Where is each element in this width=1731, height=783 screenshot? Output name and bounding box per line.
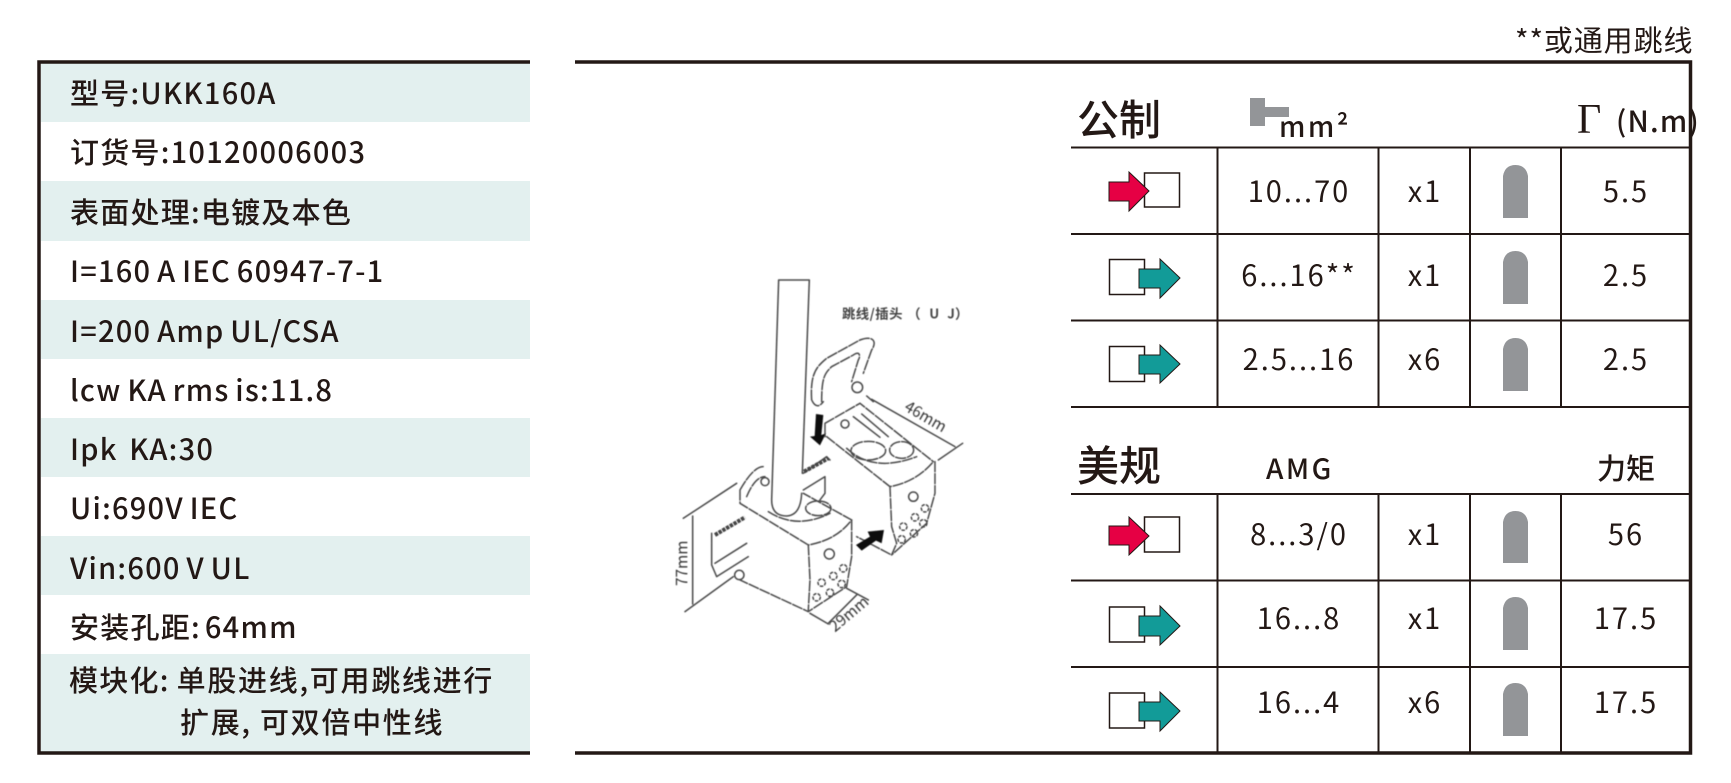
row: 16...4 [1110, 680, 1658, 736]
grid lines [1071, 147, 1690, 407]
row: 2.5...16 [1110, 337, 1649, 391]
icon: bolt [1250, 98, 1289, 126]
table: US [1071, 433, 1690, 752]
spec: model: 型号:UKK160A [70, 71, 277, 113]
label: jumper plug: （ [907, 304, 921, 323]
spec: IEC current: I=160 A IEC 60947-7-1 [70, 249, 384, 291]
spec: modularity: 模块化:单股进线,可用跳线进行 [69, 658, 494, 700]
label: jumper plug: J [947, 304, 955, 323]
label: jumper plug: U [929, 304, 939, 323]
diagram: terminal blocks with jumper [670, 280, 968, 636]
row: 2.5...16: x6 [1408, 337, 1442, 379]
spec: Icw: lcw KA rms is:11.8 [70, 368, 333, 410]
note: or universal jumper: **或通用跳线 [1515, 18, 1693, 60]
heading: mm²: mm² [1279, 106, 1351, 146]
row: 16...4: x6 [1408, 680, 1442, 722]
row: 10...70: x1 [1408, 169, 1442, 211]
spec: Ui: Ui:690V IEC [70, 486, 238, 528]
row: 16...8 [1110, 596, 1658, 650]
grid lines [1071, 494, 1690, 752]
row: 10...70: 10...70 [1248, 169, 1350, 211]
label: 77mm: 77mm [670, 541, 692, 586]
heading: N.m: (N.m) [1616, 99, 1700, 141]
heading: torque: 力矩 [1597, 446, 1655, 488]
row: 8...3/0: x1 [1408, 512, 1442, 554]
row: 8...3/0: 8...3/0 [1250, 512, 1348, 554]
row: 10...70: 5.5 [1603, 169, 1649, 211]
row: 16...4: 17.5 [1594, 680, 1658, 722]
panel: wiring tables [575, 18, 1700, 753]
row: 6...16** [1110, 251, 1649, 304]
row: 16...8: 17.5 [1594, 596, 1658, 638]
label: jumper plug: 跳线/插头 [842, 304, 903, 323]
row: 10...70 [1109, 165, 1649, 218]
table: metric [1071, 87, 1700, 407]
row: 16...8: x1 [1408, 596, 1442, 638]
heading: metric: 公制 [1077, 87, 1161, 148]
row: 8...3/0 [1109, 511, 1644, 563]
label: 46mm: 46mm [901, 395, 951, 437]
heading: AMG: AMG [1266, 448, 1334, 488]
spec: modularity: 扩展, 可双倍中性线 [180, 700, 444, 742]
spec: mounting hole distance: 安装孔距:64mm [70, 605, 298, 647]
label: jumper plug: ） [955, 304, 968, 323]
arrow: jumper insertion [810, 414, 826, 445]
heading: US: 美规 [1077, 433, 1161, 494]
row: 16...4: 16...4 [1257, 680, 1341, 722]
panel: specifications [39, 62, 530, 753]
row: 8...3/0: 56 [1608, 512, 1644, 554]
row: 6...16**: 6...16** [1241, 253, 1357, 295]
row: 2.5...16: 2.5...16 [1243, 337, 1355, 379]
row: 16...8: 16...8 [1257, 596, 1341, 638]
line art [683, 280, 963, 624]
spec: Vin: Vin:600 V UL [69, 546, 251, 588]
arrow: connect modules [856, 530, 884, 551]
spec: modularity [69, 658, 494, 742]
icon: torque gamma: Γ [1577, 97, 1601, 143]
spec: Ipk: Ipk KA:30 [70, 427, 214, 469]
spec: order number: 订货号:10120006003 [70, 130, 366, 172]
row: 6...16**: x1 [1408, 253, 1442, 295]
row: 2.5...16: 2.5 [1603, 337, 1649, 379]
spec: UL current: I=200 Amp UL/CSA [70, 309, 340, 351]
row: 6...16**: 2.5 [1603, 253, 1649, 295]
spec: surface treatment: 表面处理:电镀及本色 [70, 190, 352, 232]
label: 29mm: 29mm [824, 590, 873, 636]
